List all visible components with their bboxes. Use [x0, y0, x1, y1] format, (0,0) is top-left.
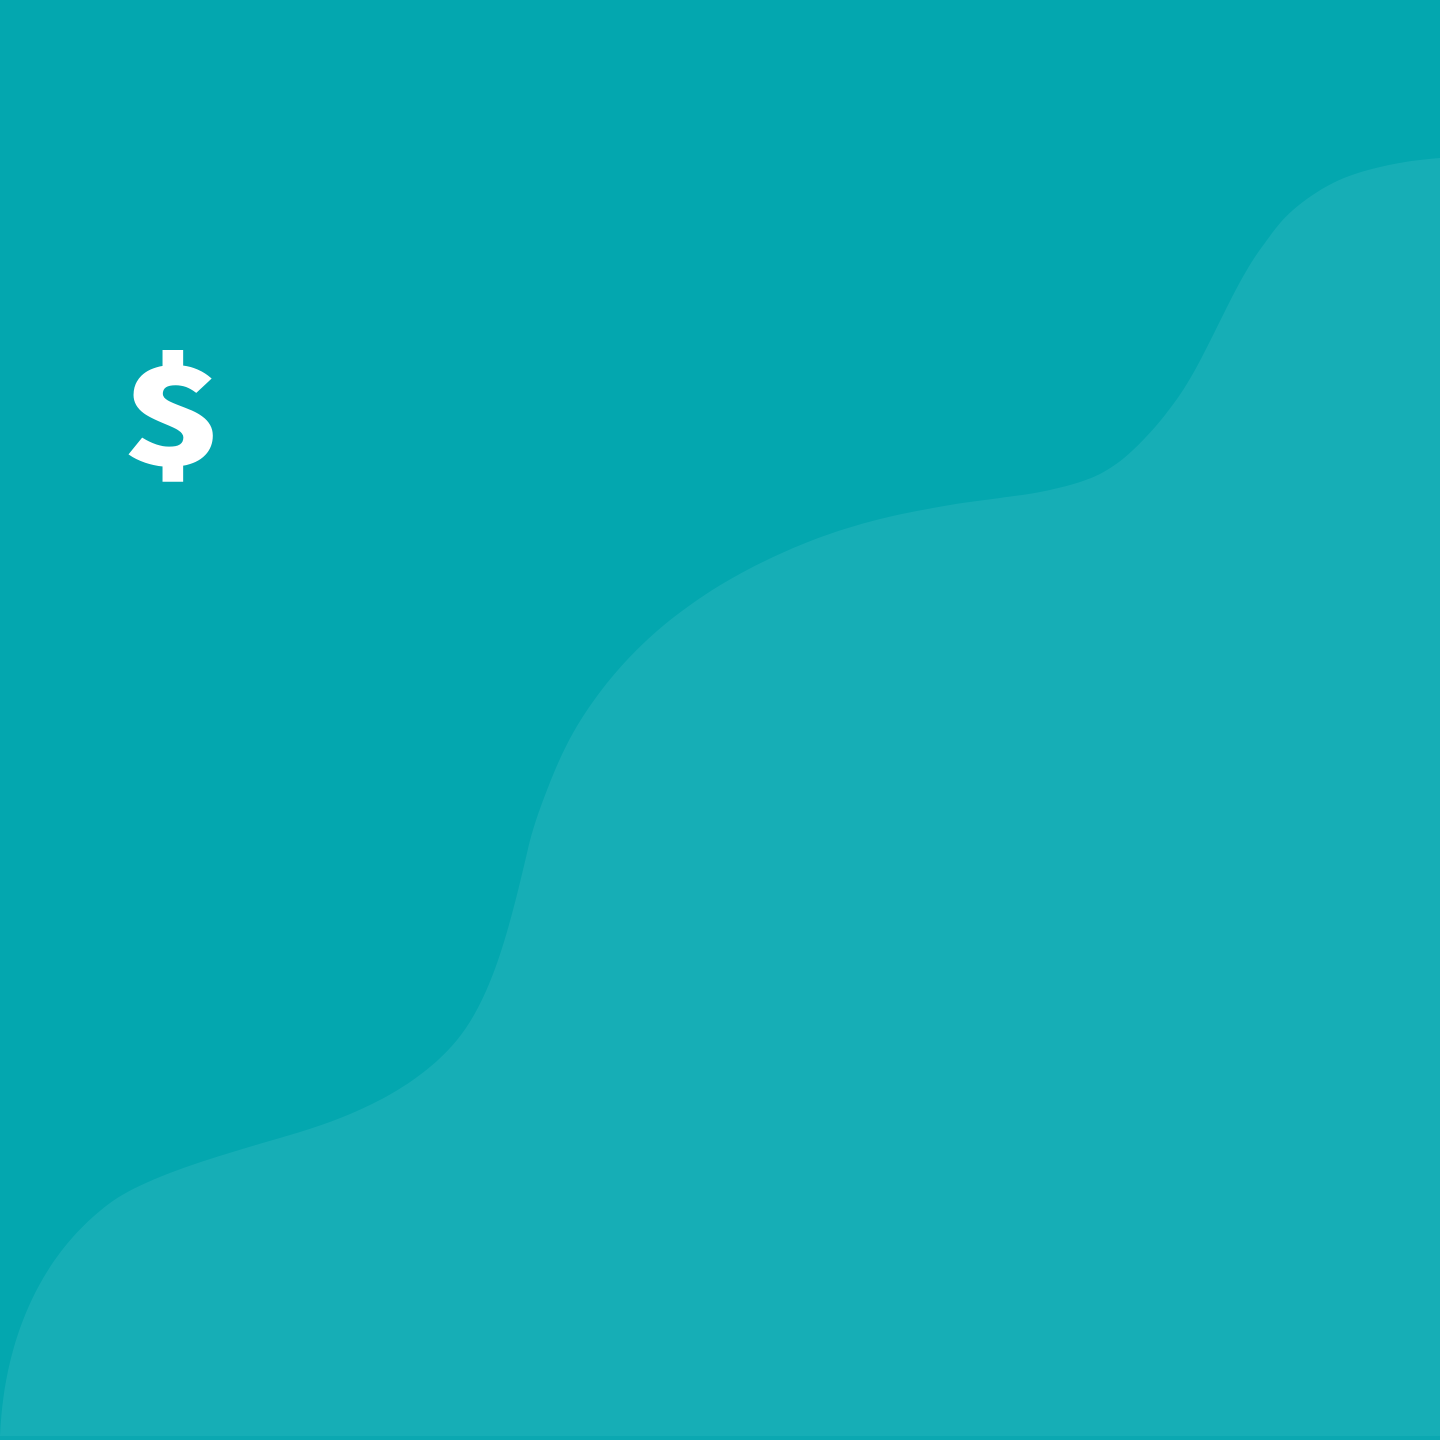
icon: dollar sign: $: [122, 310, 224, 503]
bottom edge strip: [0, 1436, 1440, 1440]
